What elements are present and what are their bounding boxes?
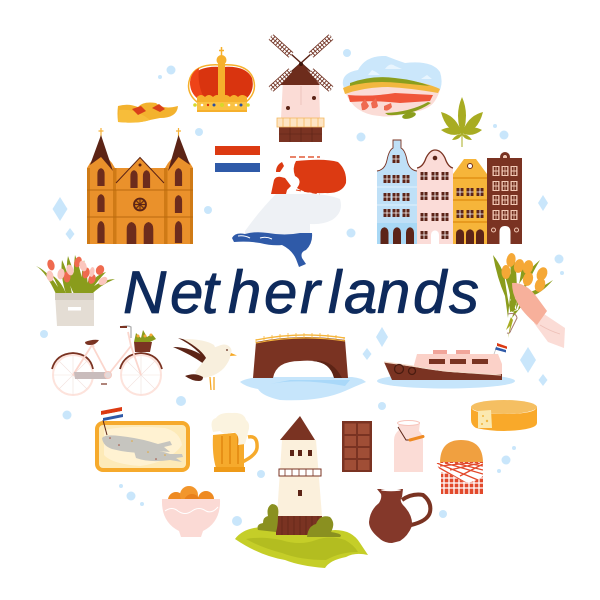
icon: clay jug [369, 489, 430, 543]
icon: windmill [271, 36, 331, 142]
map of the Netherlands in flag colours [232, 157, 346, 267]
icon: lighthouse on a green island [235, 416, 368, 568]
icon: bouquet of tulips in a hand [493, 252, 565, 348]
icon: bicycle [52, 326, 162, 395]
icon: cheese wheel [471, 400, 537, 431]
icon: mug of beer [212, 413, 257, 472]
icon: Dutch flag [215, 146, 260, 172]
house: blue [377, 140, 417, 244]
icon: herring on a tray with flag [97, 407, 188, 470]
icon: cannabis leaf [441, 97, 483, 147]
icon: gothic church [87, 128, 193, 244]
house: pink [417, 150, 453, 244]
house: yellow [453, 159, 487, 244]
icon: row of canal houses [377, 140, 522, 244]
icon: royal crown [189, 47, 254, 112]
icon: seagull [173, 338, 237, 390]
icon: canal boat [377, 343, 515, 388]
icon: tulip field landscape [343, 56, 442, 120]
icon: wooden clogs [118, 102, 178, 123]
icon: chocolate bar [342, 421, 372, 472]
title: Netherlands [123, 259, 479, 326]
icon: bowl of bitterballen [162, 486, 220, 537]
icon: tulips in a box [36, 255, 115, 326]
icon: arched stone bridge over water [240, 333, 366, 400]
house: brown [487, 152, 522, 244]
decorative dots and sparkles [40, 49, 564, 526]
icon: stroopwafel with checked cloth [436, 440, 483, 494]
icon: milk can [394, 420, 423, 472]
